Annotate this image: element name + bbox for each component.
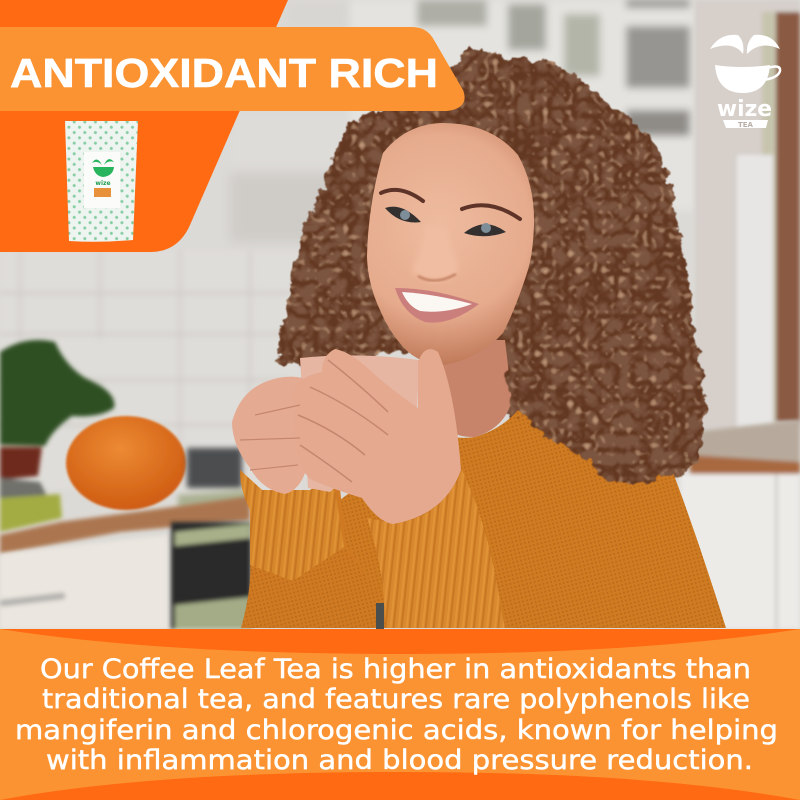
logo wordmark: wize xyxy=(717,97,772,122)
pack label xyxy=(84,152,120,208)
bottom arc xyxy=(0,772,800,800)
pack pouch xyxy=(65,121,138,242)
left sleeve xyxy=(240,470,378,628)
wall cupboard and extractor xyxy=(231,174,327,240)
stove xyxy=(178,448,250,510)
hair in front of sweater xyxy=(504,364,708,486)
woman's hair xyxy=(278,46,705,490)
right sleeve cuff xyxy=(367,470,505,628)
upper shelves xyxy=(350,0,695,210)
photo background: kitchen xyxy=(0,0,800,629)
dark orange header shape xyxy=(0,0,288,252)
description text: Our Coffee Leaf Tea is higher in antioxidants than xyxy=(40,654,751,685)
logo leaf left xyxy=(710,35,743,54)
logo tea label: TEA xyxy=(738,121,754,129)
pumpkin xyxy=(66,416,186,510)
left hand xyxy=(232,377,306,494)
top arc xyxy=(0,629,800,654)
description text: with inflammation and blood pressure reduction. xyxy=(46,745,753,776)
right hand xyxy=(293,349,461,524)
title banner xyxy=(0,27,465,111)
left counter xyxy=(0,496,250,554)
pack flavour tag xyxy=(94,188,111,197)
product pack xyxy=(65,121,138,242)
pack brand: wize xyxy=(95,180,111,187)
left cabinet xyxy=(0,535,168,629)
sweater xyxy=(240,405,726,629)
logo cup xyxy=(715,65,770,93)
logo cup handle xyxy=(763,67,780,80)
face xyxy=(367,123,534,365)
smile xyxy=(395,288,479,323)
gap between sleeves xyxy=(376,603,384,629)
pack leaf logo xyxy=(92,159,114,165)
description text xyxy=(15,654,778,776)
mug xyxy=(300,355,419,492)
oven xyxy=(171,522,251,629)
tiled wall xyxy=(0,250,300,490)
title: ANTIOXIDANT RICH xyxy=(10,50,438,96)
neck xyxy=(443,340,512,437)
description text: mangiferin and chlorogenic acids, known for helping xyxy=(15,715,778,746)
description text: traditional tea, and features rare polyphenols like xyxy=(42,684,750,715)
sweater body xyxy=(330,405,726,628)
nose xyxy=(414,247,456,278)
eyebrows xyxy=(381,190,520,219)
right counter and cabinet xyxy=(680,420,800,629)
eyes xyxy=(385,207,421,222)
pack cup xyxy=(93,167,114,177)
right wall and window frame xyxy=(695,0,800,430)
plant xyxy=(0,340,114,532)
wize tea logo xyxy=(710,35,780,129)
logo leaf right xyxy=(747,35,780,54)
logo tea band xyxy=(723,120,768,128)
bottom panel xyxy=(0,629,800,800)
